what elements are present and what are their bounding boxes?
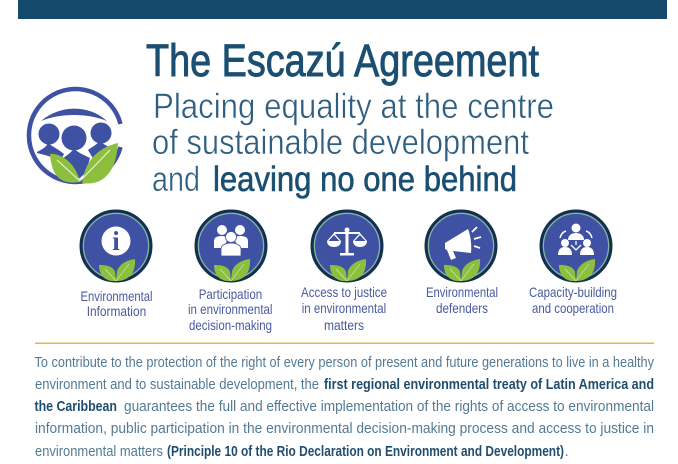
pillar: environmental defenders — [426, 211, 498, 316]
label: in environmental — [302, 300, 386, 316]
icon: scales of justice — [312, 211, 382, 281]
title: The Escazú Agreement — [146, 35, 539, 86]
pillar: environmental information — [80, 211, 152, 319]
label — [426, 284, 498, 316]
logo: people and leaves — [29, 89, 120, 184]
label: Participation — [199, 286, 262, 302]
body paragraph: environmental matters — [35, 443, 163, 460]
top banner — [18, 0, 667, 19]
label — [529, 284, 617, 316]
label — [188, 286, 272, 333]
subtitle: of sustainable development — [152, 123, 529, 162]
label — [80, 288, 152, 319]
label: Environmental — [426, 284, 498, 300]
label: defenders — [436, 300, 488, 316]
icon: network of people — [541, 211, 611, 281]
subtitle — [152, 87, 554, 199]
body paragraph: (Principle 10 of the Rio Declaration on Environment and Development) — [167, 443, 564, 460]
pillar: access to justice — [301, 211, 387, 333]
pillar: participation — [188, 211, 272, 333]
icon: megaphone — [426, 211, 496, 281]
label: Environmental — [80, 288, 152, 304]
label: in environmental — [188, 301, 272, 317]
body paragraph — [34, 354, 654, 460]
icon: information: i — [112, 226, 120, 256]
icon: people group — [196, 211, 266, 281]
label: Information — [87, 303, 146, 319]
label: Capacity-building — [529, 284, 617, 300]
body paragraph: environment and to sustainable development, the — [35, 376, 319, 393]
body paragraph: the Caribbean — [34, 398, 117, 415]
pillar: capacity-building — [529, 211, 617, 316]
label — [301, 284, 387, 333]
subtitle: and — [152, 160, 200, 199]
body paragraph: . — [564, 443, 569, 460]
subtitle: Placing equality at the centre — [153, 87, 554, 126]
subtitle: leaving no one behind — [213, 160, 517, 199]
label: matters — [324, 317, 364, 333]
label: decision-making — [189, 317, 272, 333]
label: Access to justice — [301, 284, 387, 300]
label: and cooperation — [532, 300, 614, 316]
